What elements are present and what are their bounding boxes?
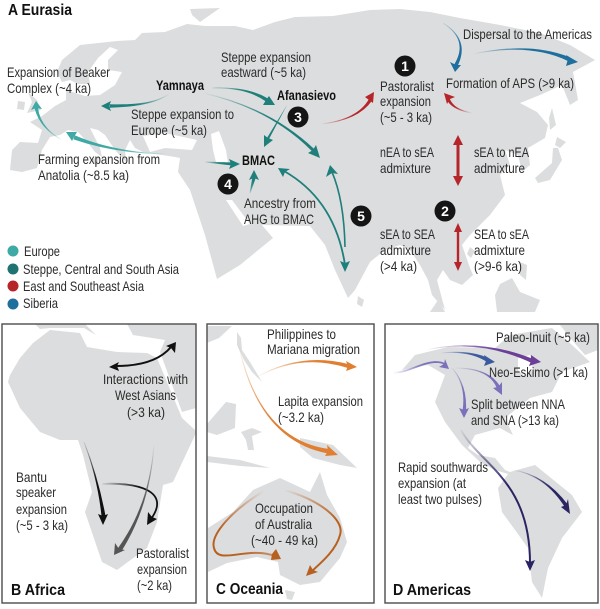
arrow: Neo-Eskimo: [440, 352, 495, 366]
panel: Eurasia map: [7, 2, 595, 312]
arrow: Formation of APS: [444, 93, 472, 113]
label: SEA to sEA: SEA to sEA: [474, 226, 530, 242]
arrow: Philippines to Mariana: [255, 360, 357, 378]
label: Split NNA SNA: Split between NNA: [471, 396, 566, 412]
arrow: to eastern North America: [455, 368, 502, 395]
label: Yamnaya: Yamnaya: [156, 77, 204, 93]
arrow: Pastoralist expansion: [321, 92, 374, 124]
heading: B Africa: B Africa: [11, 582, 65, 599]
label: Formation of APS: Formation of APS (>9 ka): [446, 75, 574, 91]
arrow: Afanasievo to BMAC: [264, 105, 287, 147]
arrow: Siberia to APS: [443, 23, 461, 72]
label: Steppe to Europe: Steppe expansion to: [131, 106, 234, 122]
arrow: branch to Brazil: [513, 470, 570, 514]
marker 4: 4: [224, 176, 232, 192]
label: sEA to SEA: [380, 226, 436, 274]
arrow: Beaker expansion: [31, 101, 62, 140]
panel: Africa: [2, 324, 196, 603]
label: Farming expansion: [38, 151, 160, 183]
map: Americas: [402, 325, 598, 598]
label: nEA to sEA: nEA to sEA: [380, 144, 434, 160]
label: Beaker complex: Expansion of Beaker: [7, 64, 110, 80]
marker 4: [218, 174, 238, 194]
label: Occupation of Australia: of Australia: [255, 516, 312, 532]
label: Steppe eastward: Steppe expansion: [221, 49, 311, 65]
label: Beaker complex: Complex (~4 ka): [7, 80, 91, 96]
marker 3: 3: [294, 109, 302, 125]
label: Bantu speaker: (~5 - 3 ka): [16, 517, 68, 533]
label: Ancestry from AHG: [244, 195, 316, 227]
label: Steppe eastward: [221, 49, 311, 80]
arrow: AHG to BMAC: [249, 170, 259, 193]
arrow: sEA SEA admixture: [454, 223, 462, 271]
label: Lapita: [278, 393, 363, 425]
arrow: first wave: [393, 359, 449, 373]
label: Interactions: West Asians: [115, 387, 176, 403]
heading: D Americas: D Americas: [393, 582, 471, 599]
marker 2: 2: [441, 203, 449, 219]
arrow: Bantu west: [84, 442, 108, 525]
arrow: Yamnaya eastward: [203, 93, 320, 158]
arrow: rapid southwards to South America: [461, 430, 535, 571]
panel: Oceania: [207, 324, 374, 603]
marker 2: [434, 200, 456, 222]
label: Philippines to Mariana: [267, 326, 360, 357]
arrow: Interactions with West Asians: [109, 342, 176, 371]
marker 3: [288, 106, 308, 128]
label: sEA to nEA: sEA to nEA: [474, 144, 530, 160]
label: Ancestry from AHG: AHG to BMAC: [244, 211, 314, 227]
arrow: South Asia to BMAC two-way: [278, 168, 350, 272]
label: Bantu speaker: expansion: [16, 501, 67, 517]
label: Steppe eastward: eastward (~5 ka): [221, 64, 306, 80]
label: Philippines to Mariana: Philippines to: [267, 326, 336, 342]
map: Eurasia landmass: [10, 8, 595, 312]
heading: A Eurasia: A Eurasia: [8, 2, 72, 19]
label: Pastoralist expansion: [380, 78, 434, 125]
label: Lapita: (~3.2 ka): [278, 409, 324, 425]
label: Rapid southwards: expansion (at: [398, 475, 466, 491]
arrow: Occupation east: [284, 490, 341, 576]
arrow: split south: [452, 368, 469, 418]
label: Farming expansion: Farming expansion from: [38, 151, 160, 167]
label: Occupation of Australia: (~40 - 49 ka): [251, 532, 318, 548]
label: Occupation of Australia: Occupation: [255, 500, 313, 516]
frame: [385, 324, 598, 603]
label: SEA to sEA: [474, 226, 530, 274]
label: Interactions: [103, 371, 188, 420]
arrow: Occupation west: [214, 491, 281, 560]
heading: C Oceania: C Oceania: [216, 581, 283, 598]
label: Pastoralist: expansion: [137, 561, 187, 577]
label: Bantu speaker: [16, 469, 68, 533]
arrow: Bantu east: [102, 484, 157, 525]
arrow: Paleo-Inuit: [425, 346, 541, 366]
label: Philippines to Mariana: Mariana migration: [267, 341, 360, 357]
map: Africa: [8, 324, 196, 570]
label: Split NNA SNA: and SNA (>13 ka): [471, 412, 559, 428]
label: SEA to sEA: admixture: [474, 242, 525, 258]
arrow: nEA sEA admixture: [453, 135, 463, 186]
label: Interactions: Interactions with: [103, 371, 188, 387]
label: Interactions: (>3 ka): [127, 404, 165, 420]
label: Ancestry from AHG: Ancestry from: [244, 195, 316, 211]
arrow: Lapita: [238, 342, 338, 456]
frame: [207, 324, 374, 603]
marker 5: [350, 206, 372, 226]
label: Pastoralist expansion: Pastoralist: [380, 78, 434, 94]
label: Steppe to Europe: Europe (~5 ka): [131, 122, 207, 138]
label: sEA to SEA: admixture: [380, 242, 431, 258]
label: Beaker complex: [7, 64, 110, 96]
marker 1: [394, 56, 416, 76]
label: Bantu speaker: speaker: [16, 484, 56, 500]
label: Pastoralist: [136, 545, 189, 593]
label: Steppe to Europe: [131, 106, 234, 138]
label: Bantu speaker: Bantu: [16, 469, 47, 485]
arrow: Farming expansion: [66, 132, 167, 154]
label: sEA to nEA: [474, 144, 530, 176]
label: nEA to sEA: [380, 144, 434, 176]
arrow: Pastoralist: [114, 444, 154, 555]
label: Farming expansion: Anatolia (~8.5 ka): [38, 167, 129, 183]
label: BMAC: BMAC: [242, 152, 275, 168]
label: SEA to sEA: (>9-6 ka): [474, 258, 522, 274]
label: Rapid southwards: least two pulses): [398, 491, 482, 507]
marker 5: 5: [357, 208, 365, 224]
arrow: South Asia northward: [326, 165, 345, 247]
label: Lapita: Lapita expansion: [278, 393, 363, 409]
label: Rapid southwards: Rapid southwards: [398, 459, 488, 475]
label: Split NNA SNA: [471, 396, 566, 428]
label: Afanasievo: Afanasievo: [277, 87, 336, 103]
legend: Siberia: [23, 295, 58, 311]
marker 1: 1: [401, 58, 409, 74]
arrow: Steppe expansion to Europe: [101, 93, 170, 111]
legend: Europe: [24, 243, 60, 259]
legend: [8, 243, 179, 311]
label: sEA to nEA: admixture: [474, 160, 525, 176]
arrow: into BMAC from west: [205, 159, 240, 169]
label: sEA to SEA: sEA to SEA: [380, 226, 436, 242]
label: sEA to SEA: (>4 ka): [380, 258, 417, 274]
label: nEA to sEA: admixture: [380, 160, 431, 176]
label: Pastoralist expansion: expansion: [380, 93, 431, 109]
frame: [2, 324, 196, 603]
panel: Americas: [385, 324, 598, 603]
label: Pastoralist expansion: (~5 - 3 ka): [380, 109, 432, 125]
label: Pastoralist: (~2 ka): [137, 577, 172, 593]
label: Rapid southwards: [398, 459, 488, 507]
arrow: Yamnaya to Afanasievo: [212, 88, 275, 105]
arrow: Dispersal to the Americas: [473, 49, 578, 66]
legend: East and Southeast Asia: [23, 278, 144, 294]
legend: Steppe, Central and South Asia: [23, 261, 179, 277]
map: Oceania: [207, 326, 357, 600]
label: Pastoralist: Pastoralist: [136, 545, 189, 561]
label: Occupation of Australia: [251, 500, 318, 548]
